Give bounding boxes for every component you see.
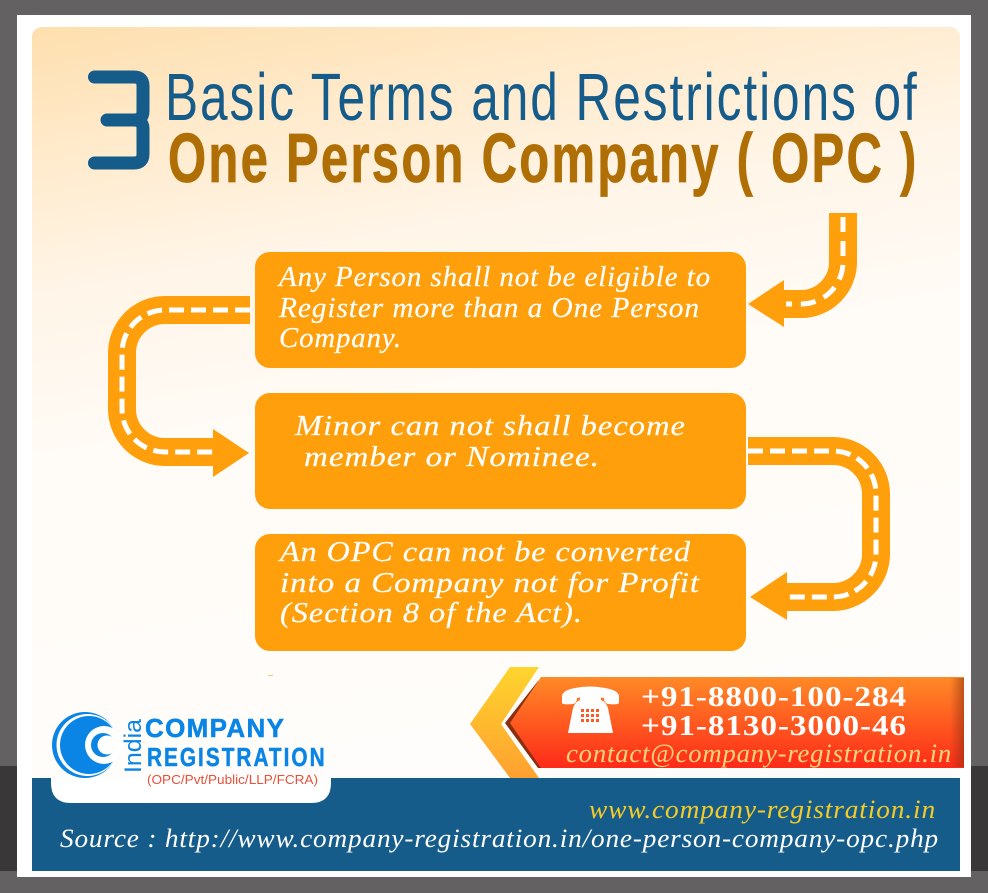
panel: term 1: Register more than a One Person [278,292,700,324]
panel: term 1: Any Person shall not be eligible to [277,261,711,293]
title: One Person Company ( OPC ) [168,118,916,197]
panel: term 2: Minor can not shall become [294,410,686,442]
logo: India [120,718,147,773]
footer band [32,778,960,871]
panel: term 2: member or Nominee. [304,441,600,473]
panel: term 1 [255,252,746,368]
logo: (OPC/Pvt/Public/LLP/FCRA) [147,772,318,787]
website and source: Source : http://www.company-registration.in/one-person-company-opc.php [60,824,939,853]
phone numbers: +91-8130-3000-46 [641,711,907,742]
title number 3 [94,77,143,163]
panel: term 3: into a Company not for Profit [280,567,700,599]
chevron [470,667,539,778]
icon: telephone [562,686,619,733]
title: Basic Terms and Restrictions of [165,61,917,135]
arrow: box 1 to box 2 [122,310,250,477]
title [165,61,917,197]
logo: REGISTRATION [147,743,325,772]
email: contact@company-registration.in [566,739,952,768]
phone numbers [641,682,907,742]
panel: term 3: (Section 8 of the Act). [280,597,583,629]
background panel [32,27,960,787]
contact banner [505,677,964,768]
logo [51,712,331,803]
logo: COMPANY [145,713,284,743]
panel: term 1: Company. [279,322,402,354]
website and source [60,795,939,853]
icon: logo swirl [52,712,123,778]
panel: term 2 [255,393,746,509]
website and source: www.company-registration.in [589,795,936,824]
panel: term 3 [255,534,746,651]
arrow: entry to box 1 [748,213,843,327]
panel: term 3: An OPC can not be converted [278,536,691,568]
phone numbers: +91-8800-100-284 [641,682,907,713]
arrow: box 2 to box 3 [748,451,876,620]
